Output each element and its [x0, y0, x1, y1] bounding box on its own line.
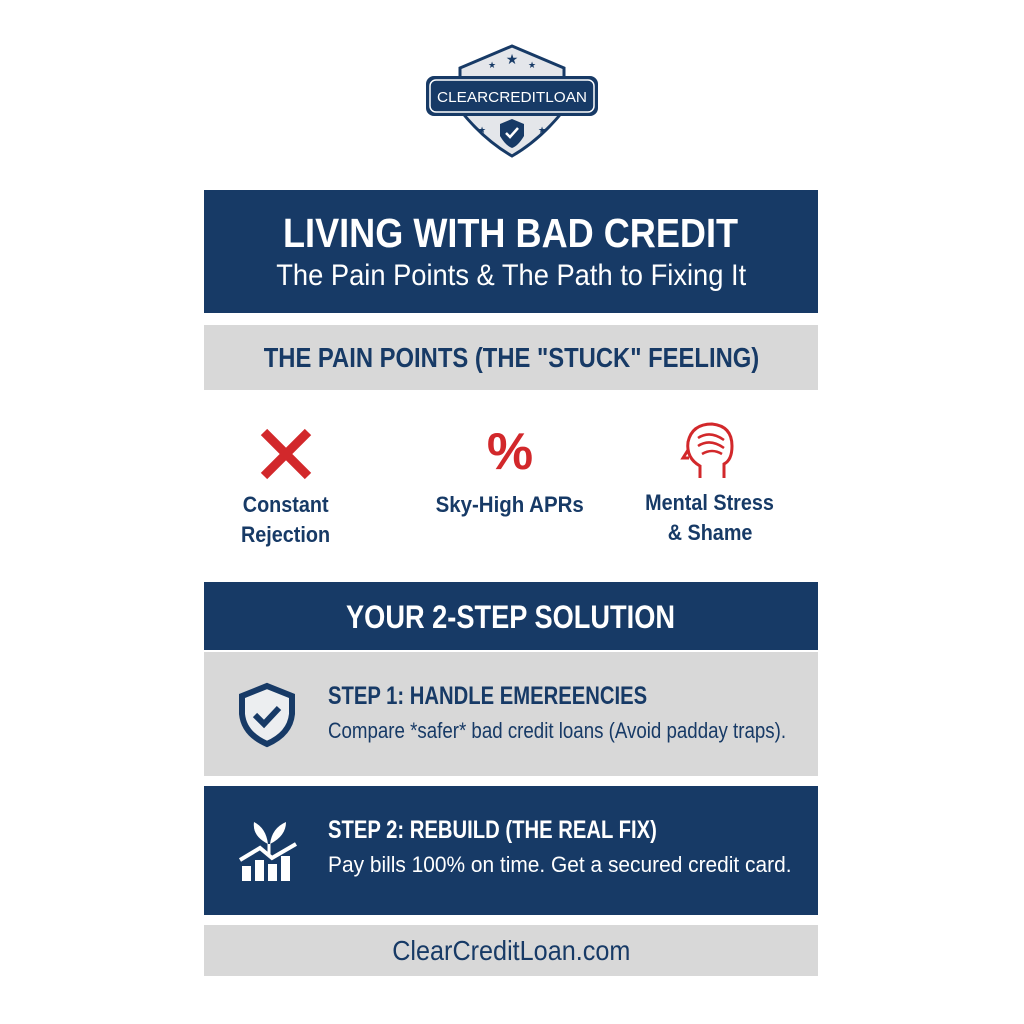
logo badge: CLEARCREDITLOAN: [437, 89, 587, 106]
step 2: STEP 2: REBUILD (THE REAL FIX): [328, 816, 657, 844]
logo badge: [426, 44, 598, 158]
title banner: [204, 190, 818, 313]
step 1: STEP 1: HANDLE EMEREENCIES: [328, 682, 647, 710]
pain: APRs: Sky-High APRs: [436, 492, 584, 517]
logo badge: ★: [538, 125, 546, 135]
title banner: The Pain Points & The Path to Fixing It: [276, 259, 746, 292]
step 2: [204, 786, 818, 915]
pain: stress: & Shame: [668, 520, 752, 545]
logo badge: ★: [488, 60, 496, 70]
pain: APRs: [436, 423, 584, 517]
logo badge: ★: [478, 125, 486, 135]
solution header: YOUR 2-STEP SOLUTION: [347, 599, 675, 635]
step 1: Compare *safer* bad credit loans (Avoid padday traps).: [328, 718, 786, 743]
pain: rejection: Rejection: [241, 522, 331, 547]
pain points header: THE PAIN POINTS (THE "STUCK" FEELING): [263, 342, 759, 373]
step 2: Pay bills 100% on time. Get a secured credit card.: [328, 852, 792, 877]
logo badge: ★: [506, 51, 518, 67]
pain: stress: [646, 422, 774, 545]
icon: growth: [239, 822, 297, 881]
footer url: [204, 925, 818, 976]
pain points header: [204, 325, 818, 390]
solution header: [204, 582, 818, 650]
pain: APRs: %: [487, 423, 533, 481]
footer url: ClearCreditLoan.com: [392, 935, 630, 966]
logo badge: ★: [528, 60, 536, 70]
pain: rejection: Constant: [243, 492, 329, 517]
icon: shield: [239, 682, 295, 748]
step 1: [204, 652, 818, 776]
title banner: LIVING WITH BAD CREDIT: [284, 210, 738, 256]
pain: rejection: [241, 428, 331, 547]
pain: stress: Mental Stress: [646, 490, 774, 515]
